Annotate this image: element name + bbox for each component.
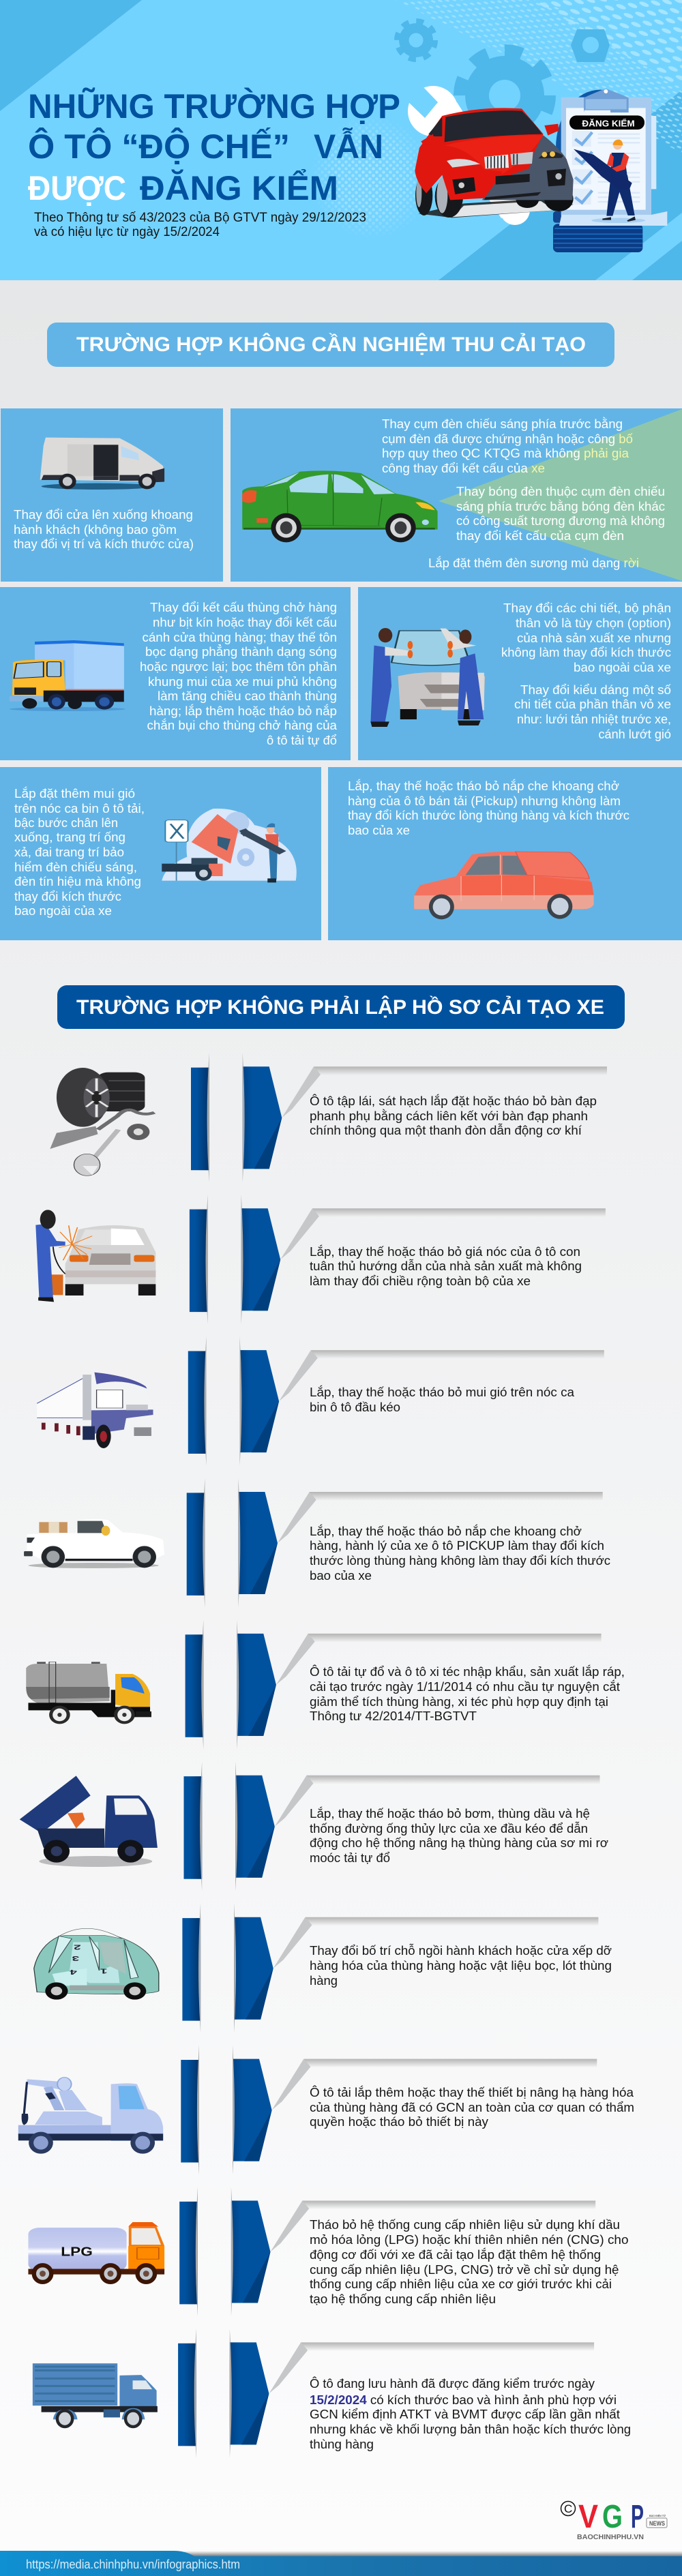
row 2 [35, 1195, 606, 1324]
text [310, 2218, 629, 2306]
text: của thùng hàng đã có GCN an toàn của cơ quan có thẩm [310, 2101, 634, 2114]
icon: white pickup [24, 1519, 164, 1568]
chevron marker [186, 1620, 602, 1750]
icon: cutaway car seats: 1 [100, 1967, 108, 1975]
text: Thay bóng đèn thuộc cụm đèn chiếu [456, 485, 665, 498]
text: tuân thủ hướng dẫn của nhà sản xuất mà không [310, 1259, 582, 1273]
text: Thay cụm đèn chiếu sáng phía trước bằng [382, 417, 623, 431]
text: hiểm đèn chiếu sáng, [14, 860, 137, 874]
text: chính thông qua một thanh đòn dẫn động cơ khí [310, 1123, 582, 1137]
text [14, 786, 145, 918]
text: nhưng khác về khối lượng bản thân hoặc kích thước lòng [310, 2423, 631, 2436]
label: inspection pill [569, 115, 644, 130]
text: cải tạo trước ngày 1/11/2014 có nhu cầu tự nguyện cắt [310, 1679, 620, 1694]
text [348, 779, 629, 837]
chevron marker [181, 2045, 597, 2174]
text: của nhà sản xuất xe nhưng [517, 631, 671, 645]
title: NHỮNG TRƯỜNG HỢP [28, 87, 400, 125]
chevron marker [191, 1053, 607, 1182]
checklist [572, 131, 640, 205]
panel: cargo box [0, 587, 351, 760]
text: Lắp, thay thế hoặc tháo bỏ bơm, thùng dầu và hệ [310, 1806, 590, 1821]
text: như bịt kín hoặc thay đổi kết cấu [153, 616, 337, 629]
panel: roof deflector [0, 767, 321, 940]
title: VẪN [314, 128, 383, 166]
text: thay đổi kích thước [14, 890, 121, 903]
text: đèn tín hiệu mà không [14, 875, 141, 888]
header banner [0, 0, 682, 280]
text: làm thay đổi chiều rộng toàn bộ của xe [310, 1274, 531, 1288]
text: trên nóc ca bin ô tô tải, [14, 802, 145, 815]
title [28, 87, 400, 207]
heading: không phải lập hồ sơ: TRƯỜNG HỢP KHÔNG PHẢI LẬP HỒ SƠ CẢI TẠO XE [76, 995, 604, 1019]
text: tạo hệ thống cung cấp nhiên liệu [310, 2292, 496, 2306]
text: bọc dạng phẳng thành dạng sóng [145, 644, 337, 659]
heading: không cần nghiệm thu [47, 323, 614, 367]
text [310, 1094, 597, 1137]
text: hợp quy theo QC KTQG mà không phải gia [382, 447, 629, 460]
text: khung mui của xe mui phủ không [148, 675, 337, 689]
text: Lắp, thay thế hoặc tháo bỏ nắp che khoang chở [310, 1524, 582, 1538]
chevron marker [184, 1762, 600, 1891]
text [382, 417, 665, 570]
row 8 [18, 2045, 634, 2174]
text: hàng [310, 1974, 338, 1988]
text: cung cấp nhiên liệu (LPG, CNG) trở về chỉ sử dụng hệ [310, 2263, 619, 2277]
text: chi tiết của phần thân vỏ xe [514, 698, 671, 711]
text: Lắp, thay thế hoặc tháo bỏ mui gió trên nóc ca [310, 1385, 575, 1399]
title: ĐĂNG KIỂM [140, 169, 338, 207]
text [310, 1664, 625, 1723]
text [501, 601, 671, 741]
panel: van door [1, 408, 223, 582]
logo: VGP News: G [602, 2499, 623, 2535]
text [140, 601, 338, 747]
text: như: lưới tản nhiệt trước xe, [517, 713, 671, 726]
icon: cutaway car seats [34, 1928, 159, 2000]
icon: workers fitting windshield [370, 628, 485, 727]
text: Ô tô tải tự đổ và ô tô xi téc nhập khẩu, sản xuất lắp ráp, [310, 1664, 625, 1679]
icon: LPG truck: LPG [61, 2245, 93, 2259]
icon: hex nut [571, 29, 610, 62]
text: hàng của ô tô bán tải (Pickup) nhưng không làm [348, 794, 621, 808]
text: cánh lướt gió [599, 728, 671, 741]
text: Ô tô đang lưu hành đã được đăng kiểm trước ngày [310, 2376, 595, 2391]
text: cụm đèn đã được chứng nhận hoặc công bố [382, 432, 633, 446]
icon: red covered pickup [414, 852, 594, 919]
text: GCN kiểm định ATKT và BVMT được cấp lần gần nhất [310, 2408, 620, 2421]
icon: LPG truck [28, 2222, 164, 2284]
icon: tires and parts [50, 1068, 154, 1175]
text: sáng phía trước bằng bóng đèn khác [456, 499, 665, 513]
row 6 [20, 1762, 608, 1891]
text [310, 1244, 582, 1288]
icon: cutaway car seats: 4 [70, 1968, 77, 1976]
text: cánh cửa thùng hàng; thay thế tôn [142, 631, 337, 644]
text: Thay đổi kết cấu thùng chở hàng [150, 601, 337, 614]
text: Lắp đặt thêm đèn sương mù dạng rời [428, 556, 639, 570]
text: chắn bụi cho thùng chở hàng của [147, 718, 338, 732]
icon: welder and car [35, 1210, 155, 1302]
icon: blue box truck [33, 2363, 158, 2428]
logo: VGP News [561, 2499, 667, 2541]
text: bao của xe [310, 1569, 372, 1583]
text [310, 1385, 575, 1414]
panel: pickup cover [328, 767, 682, 940]
text [14, 508, 194, 551]
icon: yellow truck [10, 640, 125, 711]
text: Thay đổi kiểu dáng một số [520, 683, 671, 697]
text: bao ngoài của xe [574, 661, 671, 674]
text: động cơ đối với xe đã cải tạo lắp đặt thêm hệ thống [310, 2247, 601, 2262]
light beam [439, 409, 682, 581]
text: hàng; lắp thêm hoặc tháo bỏ nắp [149, 704, 337, 718]
icon: tanker truck [26, 1662, 151, 1724]
heading: không phải lập hồ sơ [57, 985, 625, 1029]
row 9 [28, 2187, 628, 2316]
text [310, 1943, 612, 1988]
icon: trailer truck [37, 1372, 154, 1448]
logo: VGP News: BÁO ĐIỆN TỬ [649, 2514, 666, 2517]
text: thống cung cấp nhiên liệu của xe cơ giới trước khi cải [310, 2277, 612, 2291]
text [310, 1806, 608, 1865]
logo: VGP News: NEWS [649, 2520, 665, 2527]
row 3 [37, 1336, 604, 1466]
icon: dump truck [20, 1776, 158, 1867]
icon: white van [40, 438, 164, 490]
logo: VGP News: V [578, 2499, 598, 2535]
text: làm tăng chiều cao thành thùng [158, 689, 337, 703]
footer bar [0, 2551, 682, 2576]
row 5 [26, 1620, 625, 1750]
text: thống đường ống thủy lực của xe đầu kéo để dẫn [310, 1821, 588, 1836]
text: ô tô tải tự đổ [267, 734, 337, 747]
footer bar: https://media.chinhphu.vn/infographics.htm [26, 2558, 240, 2571]
chevron marker [179, 2187, 595, 2316]
panel: lights [231, 408, 682, 582]
logo: VGP News: P [631, 2499, 644, 2535]
text: thân vỏ là tùy chọn (option) [516, 616, 671, 630]
chevron marker [182, 1903, 598, 2033]
text: bin ô tô đầu kéo [310, 1401, 400, 1414]
icon: red car [415, 108, 574, 218]
subtitle: Theo Thông tư số 43/2023 của Bộ GTVT ngày 29/12/2023 [34, 211, 366, 225]
text: thay đổi kích thước lòng thùng hàng và kích thước [348, 809, 629, 822]
text: moóc tải tự đổ [310, 1851, 390, 1865]
text: quyền hoặc tháo bỏ thiết bị này [310, 2115, 488, 2129]
text: Tháo bỏ hệ thống cung cấp nhiên liệu sử dụng khí dầu [310, 2218, 620, 2232]
text: hàng, hành lý của xe ô tô PICKUP làm thay đổi kích [310, 1539, 604, 1553]
text: Lắp, thay thế hoặc tháo bỏ giá nóc của ô tô con [310, 1244, 580, 1259]
text: hoặc ngược lại; bọc thêm tôn phần [140, 660, 337, 674]
text: xả, đai trang trí bảo [14, 845, 124, 859]
text: thay đổi vị trí và kích thước cửa) [14, 537, 194, 551]
logo: VGP News: C [564, 2502, 572, 2515]
text: 15/2/2024 có kích thước bao và hình ảnh phù hợp với [310, 2393, 617, 2407]
text: thước lòng thùng hàng không làm thay đổi kích thước [310, 1554, 610, 1568]
icon: large gear [460, 50, 550, 140]
text: công thay đổi kết cấu của xe [382, 462, 545, 475]
chevron marker [188, 1336, 604, 1466]
worker with pen [574, 140, 645, 223]
chevron marker [187, 1478, 603, 1608]
text: không làm thay đổi kích thước [501, 646, 671, 659]
text: thay đổi kết cấu của cụm đèn [456, 529, 624, 543]
text: thùng hàng [310, 2438, 374, 2451]
text [310, 2376, 631, 2451]
text: bao ngoài của xe [14, 904, 112, 918]
text: Thay đổi các chi tiết, bộ phận [503, 601, 671, 615]
icon: white wrench [407, 83, 530, 225]
text: Ô tô tải lắp thêm hoặc thay thế thiết bị nâng hạ hàng hóa [310, 2085, 634, 2099]
text: xuống, trang trí ống [14, 830, 125, 844]
text: hành khách (không bao gồm [14, 523, 177, 537]
heading: không cần nghiệm thu: TRƯỜNG HỢP KHÔNG CẦN NGHIỆM THU CẢI TẠO [76, 333, 586, 356]
title: Ô TÔ “ĐỘ CHẾ” [28, 127, 290, 166]
text: Lắp, thay thế hoặc tháo bỏ nắp che khoang chở [348, 779, 619, 793]
logo: VGP News: BAOCHINHPHU.VN [577, 2534, 644, 2541]
text: mỏ hóa lỏng (LPG) hoặc khí thiên nhiên nén (CNG) cho [310, 2233, 629, 2247]
icon: clipboard illustration [553, 89, 667, 252]
chevron marker [178, 2328, 594, 2458]
icon: cutaway car seats: 3 [72, 1954, 79, 1962]
text [310, 1524, 610, 1583]
icon: green car [242, 470, 438, 542]
text: phanh phụ bằng cách liên kết với bàn đạp phanh [310, 1109, 588, 1123]
text: hàng hóa của thùng hàng hoặc vật liệu bọc, lót thùng [310, 1959, 612, 1973]
text: giảm thể tích thùng hàng, xi téc phù hợp quy định tại [310, 1695, 608, 1709]
panel: body options [358, 587, 682, 760]
icon: cutaway car seats: 2 [74, 1943, 81, 1951]
text: bao của xe [348, 824, 410, 837]
row 10 [33, 2328, 631, 2458]
chevron marker [190, 1195, 606, 1324]
row 7 [34, 1903, 612, 2033]
label: inspection pill: ĐĂNG KIỂM [582, 118, 635, 128]
text: Lắp đặt thêm mui gió [14, 786, 135, 800]
icon: small gear [397, 21, 435, 59]
subtitle: và có hiệu lực từ ngày 15/2/2024 [34, 225, 220, 239]
subtitle [34, 211, 366, 239]
text [310, 2085, 634, 2129]
text: động cho hệ thống nâng hạ thùng hàng của sơ mi rơ [310, 1836, 608, 1850]
text: Ô tô tập lái, sát hạch lắp đặt hoặc tháo bỏ bàn đạp [310, 1094, 597, 1108]
row 1 [50, 1053, 607, 1182]
text: Thay đổi bố trí chỗ ngồi hành khách hoặc cửa xếp dỡ [310, 1943, 612, 1958]
icon: crane truck [18, 2078, 163, 2154]
title: ĐƯỢC [28, 169, 126, 207]
row 4 [24, 1478, 610, 1608]
text: Thông tư 42/2014/TT-BGTVT [310, 1709, 477, 1723]
text: Thay đổi cửa lên xuống khoang [14, 508, 193, 522]
text: bậc bước chân lên [14, 816, 118, 830]
text: có công suất tương đương mà không [456, 514, 665, 528]
icon: mechanic and truck [162, 809, 297, 882]
